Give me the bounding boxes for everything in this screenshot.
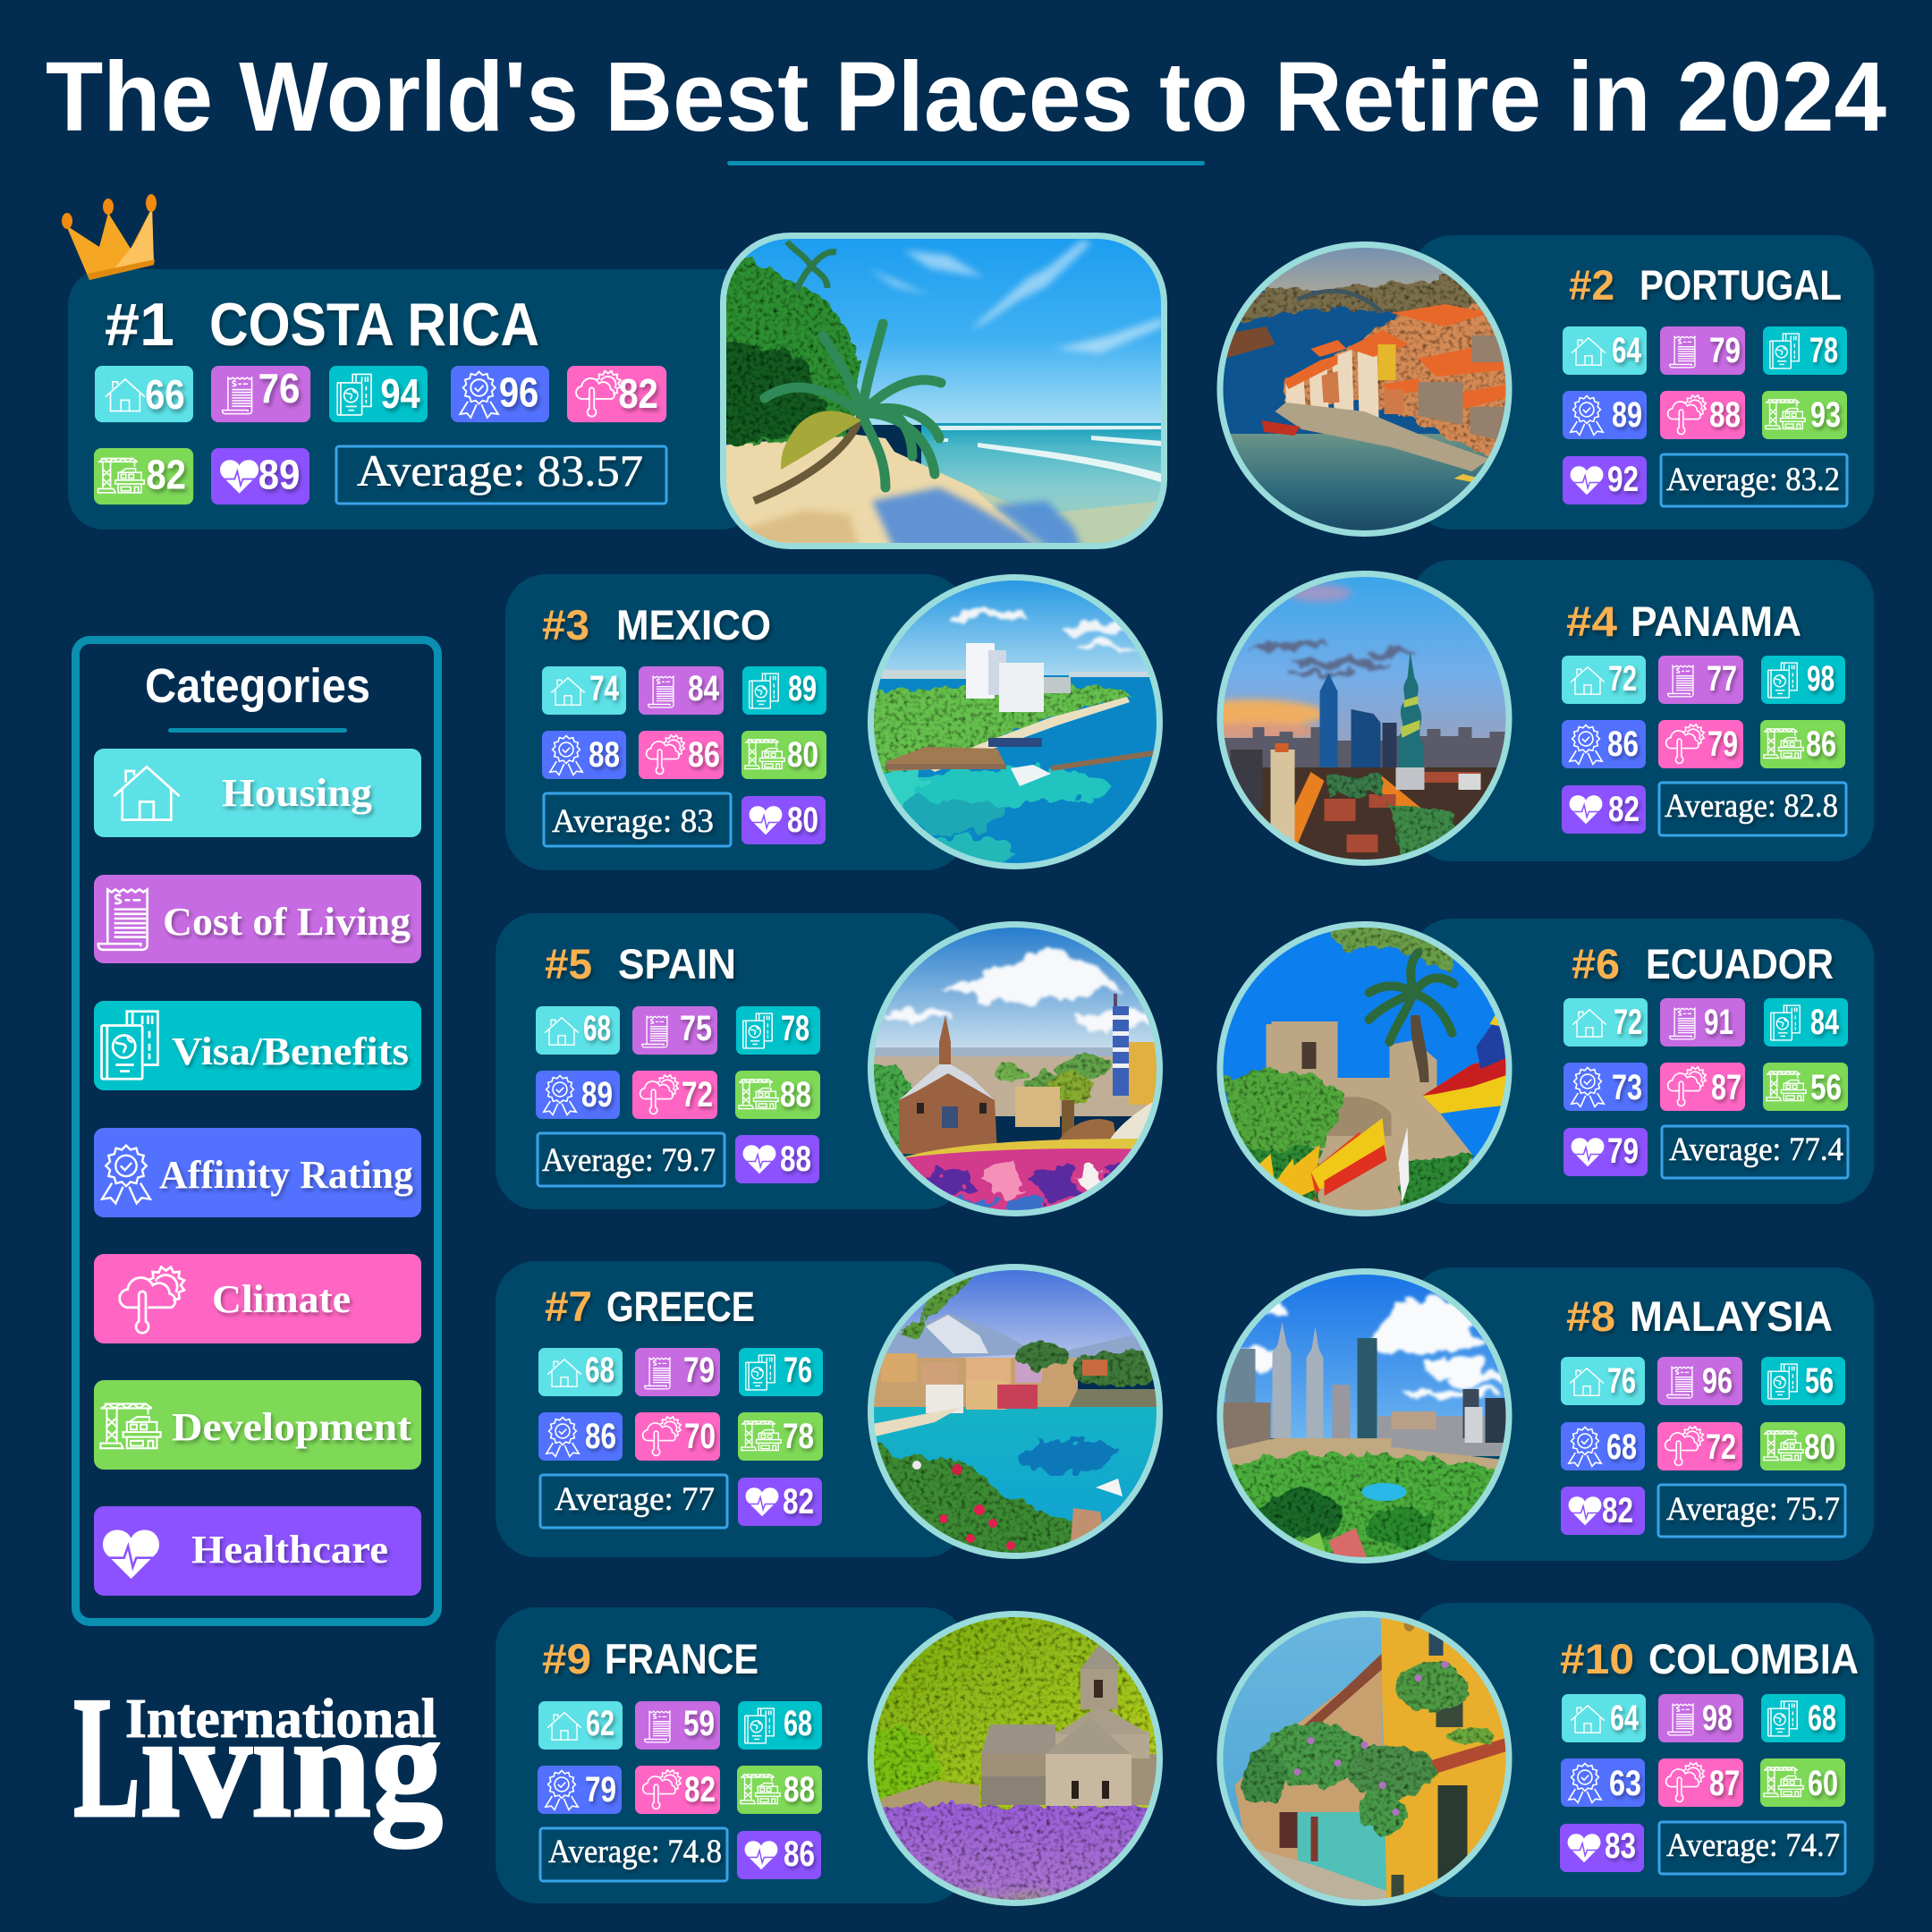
chip: cost of living 76 bbox=[211, 365, 310, 422]
legend item: cost of living bbox=[94, 875, 421, 963]
chip: affinity 79 bbox=[538, 1766, 622, 1814]
heading: MALAYSIA bbox=[1630, 1292, 1833, 1340]
legend item: healthcare bbox=[94, 1506, 421, 1596]
legend item: affinity rating bbox=[94, 1128, 421, 1217]
heading: #10 bbox=[1560, 1635, 1634, 1682]
chip: development 78 bbox=[738, 1412, 823, 1461]
chip: development 82: 82 bbox=[147, 452, 186, 498]
heading: #2 bbox=[1569, 261, 1614, 309]
heading: PORTUGAL bbox=[1640, 261, 1842, 309]
card: #5 Spain bbox=[496, 913, 1163, 1221]
chip: healthcare 92 bbox=[1563, 456, 1647, 504]
chip: visa 78: 78 bbox=[1809, 331, 1838, 370]
chip: healthcare 82 bbox=[1561, 1487, 1645, 1535]
chip: cost of living 75: 75 bbox=[680, 1009, 712, 1048]
heading bbox=[1569, 261, 1842, 309]
chip: visa 84 bbox=[1764, 998, 1848, 1046]
average box bbox=[1658, 1485, 1845, 1537]
chip: cost of living 96: 96 bbox=[1702, 1361, 1733, 1401]
chip: visa 78: 78 bbox=[781, 1009, 809, 1048]
chip: housing 68: 68 bbox=[583, 1009, 611, 1048]
legend item: affinity rating: Affinity Rating bbox=[159, 1153, 413, 1197]
average box bbox=[544, 793, 731, 846]
panel: categories legend bbox=[75, 640, 438, 1623]
photo: beach bbox=[720, 233, 1172, 553]
panel bbox=[1411, 235, 1875, 530]
chip: cost of living 59: 59 bbox=[683, 1704, 715, 1743]
average box: Average: 77.4 bbox=[1669, 1131, 1843, 1168]
chip: cost of living 98 bbox=[1658, 1694, 1743, 1742]
panel bbox=[496, 1607, 966, 1903]
chip: visa 98 bbox=[1761, 656, 1845, 704]
heading: #6 bbox=[1572, 940, 1620, 987]
average box: Average: 83 bbox=[552, 803, 714, 840]
legend heading: Categories bbox=[145, 659, 370, 713]
panel bbox=[496, 913, 966, 1209]
chip: housing 74: 74 bbox=[589, 669, 620, 708]
chip: affinity 88: 88 bbox=[589, 735, 620, 775]
chip: housing 72: 72 bbox=[1614, 1003, 1642, 1042]
card: #10 Colombia bbox=[1216, 1603, 1875, 1911]
chip: visa 68 bbox=[1761, 1694, 1845, 1742]
chip: affinity 96: 96 bbox=[499, 369, 538, 416]
chip: healthcare 86: 86 bbox=[784, 1835, 815, 1874]
average box bbox=[1659, 783, 1846, 835]
crown icon bbox=[62, 194, 157, 280]
chip: affinity 89 bbox=[536, 1071, 620, 1119]
chip: housing 66 bbox=[95, 366, 193, 422]
average box: Average: 79.7 bbox=[542, 1142, 716, 1179]
chip: affinity 89 bbox=[1563, 391, 1647, 439]
title underline bbox=[727, 161, 1205, 165]
chip: development 56: 56 bbox=[1810, 1068, 1842, 1107]
chip: climate 79: 79 bbox=[1707, 724, 1738, 764]
chip: housing 76: 76 bbox=[1607, 1361, 1636, 1401]
chip: development 78: 78 bbox=[783, 1417, 814, 1456]
chip: cost of living 79 bbox=[635, 1348, 720, 1396]
photo: Porto riverside bbox=[1216, 242, 1512, 546]
chip: housing 68 bbox=[538, 1348, 623, 1396]
title: The World's Best Places to Retire in 2024 bbox=[46, 42, 1886, 152]
chip: visa 56 bbox=[1761, 1357, 1845, 1405]
chip: visa 76: 76 bbox=[784, 1351, 812, 1390]
chip: development 88 bbox=[737, 1766, 822, 1814]
chip: housing 62: 62 bbox=[586, 1704, 614, 1743]
panel bbox=[68, 269, 757, 530]
card: #3 Mexico bbox=[505, 574, 1163, 872]
heading bbox=[545, 1283, 755, 1330]
legend item: healthcare: Healthcare bbox=[191, 1528, 388, 1572]
chip: cost of living 84 bbox=[639, 666, 724, 715]
heading: #1 bbox=[105, 291, 174, 359]
chip: climate 88 bbox=[1660, 391, 1745, 439]
chip: climate 70 bbox=[635, 1412, 720, 1461]
chip: cost of living 77 bbox=[1658, 656, 1743, 704]
photo: Assos bay bbox=[868, 1264, 1163, 1563]
chip: visa 89 bbox=[742, 666, 826, 715]
chip: housing 64: 64 bbox=[1612, 331, 1642, 370]
chip: healthcare 82: 82 bbox=[1602, 1491, 1633, 1530]
chip: affinity 73 bbox=[1563, 1063, 1648, 1111]
chip: cost of living 79: 79 bbox=[683, 1351, 715, 1390]
chip: healthcare 83 bbox=[1560, 1824, 1644, 1872]
heading: PANAMA bbox=[1631, 597, 1801, 645]
heading bbox=[1572, 940, 1834, 987]
chip: climate 72 bbox=[632, 1071, 717, 1119]
chip: climate 87 bbox=[1660, 1063, 1745, 1111]
panel bbox=[496, 1261, 966, 1557]
panel bbox=[1411, 919, 1875, 1204]
chip: housing 64: 64 bbox=[1610, 1699, 1640, 1738]
panel bbox=[505, 574, 966, 870]
card: #1 Costa Rica bbox=[62, 194, 1172, 553]
chip: cost of living 91 bbox=[1660, 998, 1745, 1046]
card: #2 Portugal bbox=[1216, 235, 1875, 546]
chip: healthcare 89: 89 bbox=[258, 452, 300, 498]
chip: development 60: 60 bbox=[1808, 1764, 1838, 1803]
chip: visa 84: 84 bbox=[1810, 1003, 1840, 1042]
average box bbox=[540, 1828, 727, 1881]
legend item: cost of living: Cost of Living bbox=[163, 900, 411, 944]
card: #8 Malaysia bbox=[1216, 1267, 1875, 1568]
chip: housing 62 bbox=[538, 1701, 623, 1750]
chip: cost of living 84: 84 bbox=[688, 669, 720, 708]
chip: development 80 bbox=[1760, 1422, 1845, 1470]
heading bbox=[1566, 597, 1801, 645]
chip: healthcare 80: 80 bbox=[787, 801, 818, 840]
legend item: housing: Housing bbox=[222, 771, 372, 815]
photo: Kuala Lumpur towers and park bbox=[1216, 1268, 1512, 1568]
chip: cost of living 79: 79 bbox=[1709, 331, 1741, 370]
average box bbox=[540, 1475, 727, 1528]
chip: development 56 bbox=[1763, 1063, 1848, 1111]
heading: #7 bbox=[545, 1283, 592, 1330]
photo: Park Guell Barcelona bbox=[847, 921, 1163, 1221]
chip: development 93: 93 bbox=[1810, 395, 1841, 435]
legend item: development: Development bbox=[172, 1405, 411, 1449]
chip: cost of living 91: 91 bbox=[1704, 1003, 1733, 1042]
chip: healthcare 86 bbox=[737, 1831, 821, 1879]
chip: affinity 86: 86 bbox=[1607, 724, 1639, 764]
chip: healthcare 89 bbox=[211, 448, 309, 504]
chip: healthcare 82: 82 bbox=[783, 1482, 814, 1521]
chip: affinity 68 bbox=[1561, 1422, 1645, 1470]
chip: healthcare 80 bbox=[741, 796, 826, 844]
chip: development 80: 80 bbox=[1804, 1428, 1835, 1467]
chip: affinity 68: 68 bbox=[1606, 1428, 1637, 1467]
heading bbox=[105, 291, 539, 359]
chip: climate 72: 72 bbox=[1706, 1428, 1736, 1467]
chip: cost of living 96 bbox=[1657, 1357, 1742, 1405]
chip: climate 82: 82 bbox=[684, 1770, 716, 1809]
chip: development 93 bbox=[1762, 391, 1847, 439]
legend item: housing bbox=[94, 749, 421, 837]
chip: climate 86 bbox=[639, 731, 724, 779]
chip: climate 87 bbox=[1658, 1758, 1743, 1807]
chip: healthcare 83: 83 bbox=[1605, 1826, 1636, 1866]
chip: cost of living 75 bbox=[632, 1006, 717, 1055]
chip: climate 87: 87 bbox=[1709, 1764, 1740, 1803]
chip: affinity 63: 63 bbox=[1609, 1764, 1641, 1803]
photo: Cuenca cathedral and flags bbox=[1216, 921, 1512, 1216]
chip: development 80: 80 bbox=[787, 735, 818, 775]
average box: Average: 74.8 bbox=[548, 1834, 722, 1870]
chip: affinity 63 bbox=[1561, 1758, 1645, 1807]
chip: development 80 bbox=[741, 731, 826, 779]
chip: healthcare 82: 82 bbox=[1608, 790, 1640, 829]
legend item: development bbox=[94, 1380, 421, 1470]
legend heading underline bbox=[168, 728, 347, 733]
chip: climate 82 bbox=[635, 1766, 720, 1814]
legend item: visa/benefits bbox=[94, 1001, 421, 1090]
heading: #5 bbox=[545, 940, 592, 987]
chip: cost of living 79 bbox=[1660, 326, 1745, 375]
average box: Average: 82.8 bbox=[1665, 788, 1838, 825]
heading bbox=[542, 601, 771, 648]
chip: housing 64 bbox=[1563, 326, 1647, 375]
chip: affinity 96 bbox=[451, 366, 549, 422]
chip: climate 72: 72 bbox=[682, 1075, 713, 1114]
panel bbox=[1411, 1603, 1875, 1897]
legend item: climate: Climate bbox=[212, 1277, 351, 1321]
legend item: climate bbox=[94, 1254, 421, 1343]
chip: affinity 86: 86 bbox=[585, 1417, 616, 1456]
chip: cost of living 98: 98 bbox=[1702, 1699, 1733, 1738]
average box: Average: 83.57 bbox=[357, 445, 643, 496]
heading: COSTA RICA bbox=[209, 291, 539, 359]
chip: healthcare 88 bbox=[735, 1135, 819, 1183]
chip: healthcare 82 bbox=[738, 1478, 822, 1526]
chip: climate 72 bbox=[1657, 1422, 1742, 1470]
photo: abbey and lavender bbox=[868, 1611, 1163, 1906]
heading: GREECE bbox=[606, 1283, 755, 1330]
chip: healthcare 79 bbox=[1563, 1128, 1648, 1176]
average box: Average: 83.2 bbox=[1666, 462, 1840, 498]
chip: climate 82: 82 bbox=[618, 370, 658, 417]
heading: COLOMBIA bbox=[1648, 1635, 1859, 1682]
average box bbox=[1662, 1126, 1848, 1178]
chip: affinity 86 bbox=[1562, 720, 1646, 768]
chip: healthcare 92: 92 bbox=[1607, 460, 1639, 499]
chip: visa 76 bbox=[739, 1348, 823, 1396]
chip: development 88: 88 bbox=[784, 1770, 815, 1809]
photo: Cartagena street bbox=[1216, 1611, 1512, 1911]
average box: Average: 75.7 bbox=[1666, 1491, 1840, 1528]
logo: International Living: International bbox=[125, 1689, 436, 1750]
heading: MEXICO bbox=[616, 601, 771, 648]
chip: climate 82 bbox=[567, 366, 666, 422]
chip: development 86: 86 bbox=[1806, 724, 1836, 764]
chip: climate 86: 86 bbox=[688, 735, 720, 775]
chip: healthcare 88: 88 bbox=[780, 1140, 811, 1179]
chip: housing 68 bbox=[536, 1006, 620, 1055]
heading bbox=[1560, 1635, 1859, 1682]
chip: visa 68: 68 bbox=[784, 1704, 812, 1743]
chip: visa 56: 56 bbox=[1805, 1361, 1834, 1401]
chip: housing 74 bbox=[542, 666, 626, 715]
chip: cost of living 59 bbox=[635, 1701, 720, 1750]
chip: housing 72 bbox=[1563, 998, 1648, 1046]
chip: affinity 86 bbox=[538, 1412, 623, 1461]
logo: International Living: L bbox=[73, 1661, 140, 1854]
average box: Average: 77 bbox=[555, 1481, 715, 1518]
chip: visa 89: 89 bbox=[788, 669, 817, 708]
chip: visa 68 bbox=[738, 1701, 822, 1750]
chip: development 60 bbox=[1760, 1758, 1845, 1807]
heading bbox=[542, 1635, 758, 1682]
chip: cost of living 77: 77 bbox=[1707, 659, 1737, 699]
chip: development 82 bbox=[94, 448, 193, 504]
chip: climate 88: 88 bbox=[1709, 395, 1741, 435]
logo: International Living: iving bbox=[140, 1684, 443, 1849]
chip: visa 78 bbox=[1763, 326, 1847, 375]
chip: affinity 79: 79 bbox=[585, 1770, 616, 1809]
chip: housing 72: 72 bbox=[1608, 659, 1637, 699]
heading: FRANCE bbox=[605, 1635, 758, 1682]
average box bbox=[1661, 454, 1847, 506]
chip: visa 68: 68 bbox=[1808, 1699, 1836, 1738]
average box bbox=[1659, 1822, 1845, 1874]
heading: SPAIN bbox=[618, 940, 736, 987]
average box bbox=[538, 1133, 724, 1186]
chip: visa 78 bbox=[736, 1006, 820, 1055]
panel bbox=[1411, 1267, 1875, 1561]
average box: Average: 74.7 bbox=[1666, 1827, 1840, 1864]
chip: visa 94 bbox=[329, 366, 428, 422]
card: #9 France bbox=[496, 1607, 1163, 1906]
card: #6 Ecuador bbox=[1216, 919, 1875, 1216]
card: #7 Greece bbox=[496, 1261, 1163, 1563]
chip: housing 68: 68 bbox=[585, 1351, 614, 1390]
chip: affinity 88 bbox=[542, 731, 626, 779]
chip: visa 98: 98 bbox=[1807, 659, 1835, 699]
legend item: visa/benefits: Visa/Benefits bbox=[172, 1030, 409, 1073]
heading: ECUADOR bbox=[1646, 940, 1834, 987]
photo: Panama City skyline bbox=[1216, 571, 1512, 866]
chip: affinity 73: 73 bbox=[1612, 1068, 1642, 1107]
heading: #3 bbox=[542, 601, 589, 648]
chip: development 86 bbox=[1760, 720, 1845, 768]
panel bbox=[1411, 560, 1875, 861]
chip: affinity 89: 89 bbox=[581, 1075, 613, 1114]
chip: visa 94: 94 bbox=[380, 370, 420, 417]
chip: climate 70: 70 bbox=[684, 1417, 716, 1456]
chip: healthcare 79: 79 bbox=[1607, 1131, 1639, 1171]
chip: development 88: 88 bbox=[780, 1075, 811, 1114]
chip: development 88 bbox=[735, 1071, 820, 1119]
chip: climate 87: 87 bbox=[1711, 1068, 1741, 1107]
chip: housing 64 bbox=[1562, 1694, 1646, 1742]
heading: #9 bbox=[542, 1635, 591, 1682]
chip: housing 66: 66 bbox=[145, 371, 185, 418]
photo: Cancun coast bbox=[868, 574, 1163, 872]
chip: affinity 89: 89 bbox=[1612, 395, 1642, 435]
chip: housing 72 bbox=[1562, 656, 1646, 704]
chip: housing 76 bbox=[1561, 1357, 1645, 1405]
chip: healthcare 82 bbox=[1562, 785, 1646, 834]
card: #4 Panama bbox=[1181, 560, 1875, 870]
chip: cost of living 76: 76 bbox=[258, 365, 300, 411]
chip: climate 79 bbox=[1658, 720, 1743, 768]
heading bbox=[545, 940, 736, 987]
heading: #4 bbox=[1566, 597, 1617, 645]
heading: #8 bbox=[1566, 1292, 1615, 1340]
